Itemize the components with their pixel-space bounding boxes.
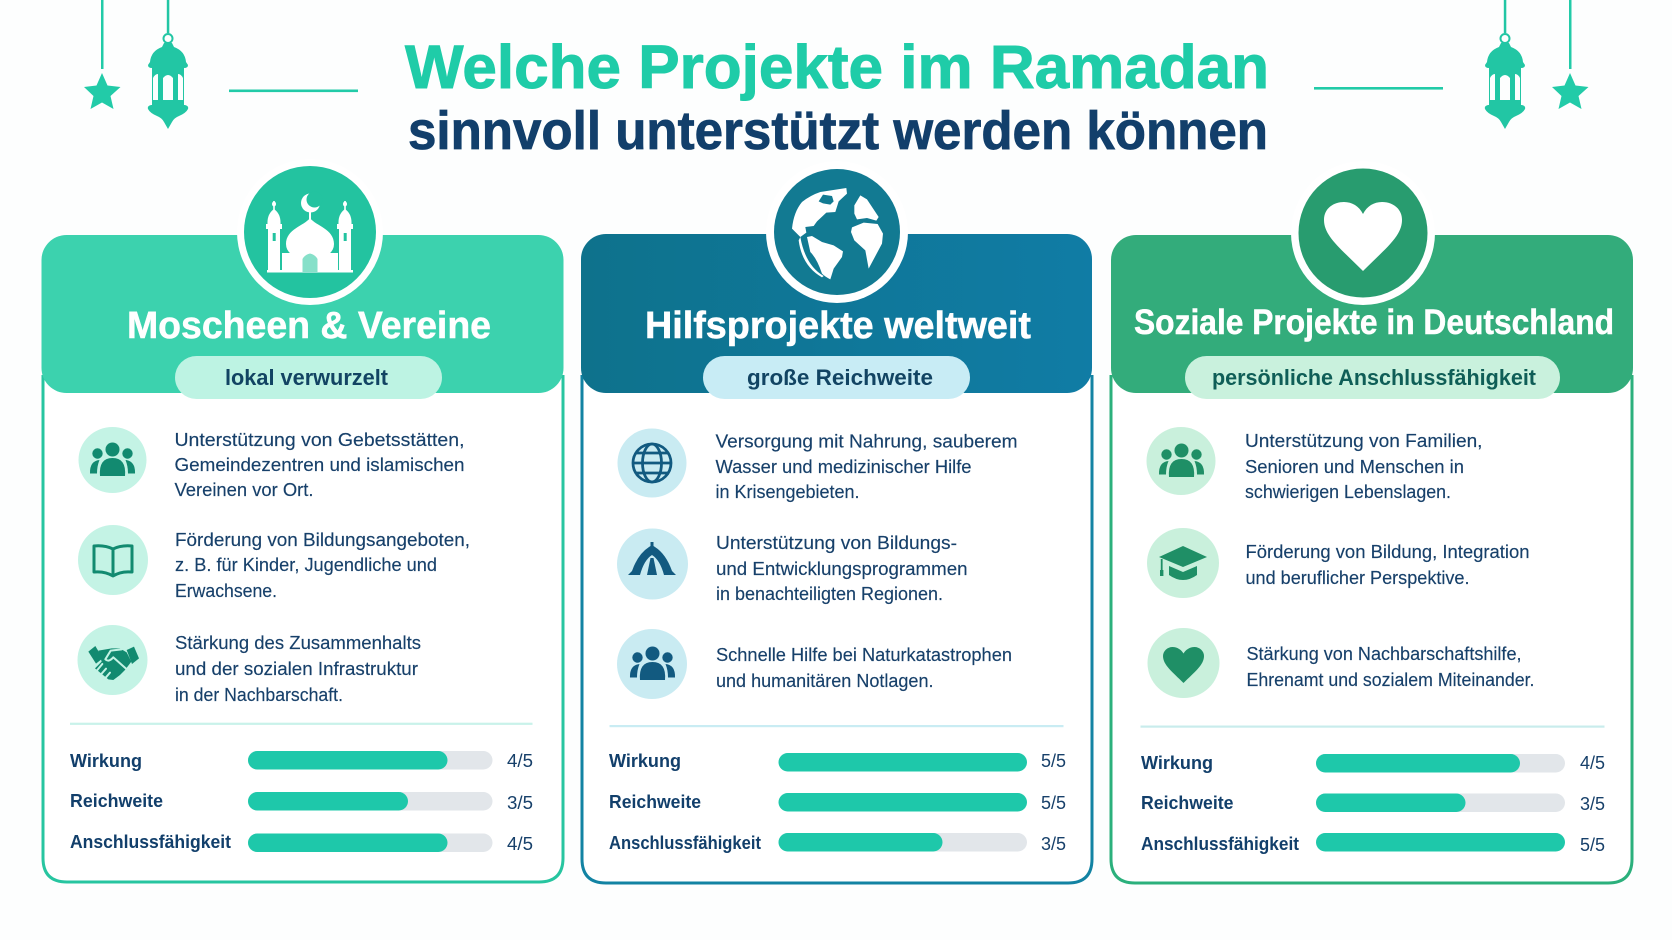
text: item 1: Wasser und medizinischer Hilfe	[716, 456, 972, 477]
rating: Reichweite 5/5: 5/5	[1041, 792, 1066, 813]
text: item 1	[716, 430, 1018, 502]
rating: Wirkung 4/5: 4/5	[1580, 752, 1605, 773]
rating: Wirkung 4/5: 4/5	[507, 750, 533, 771]
card heading: Moscheen & Vereine	[127, 305, 491, 347]
title	[405, 33, 1269, 161]
panel: Moscheen & Vereine	[42, 159, 564, 882]
rating: Reichweite 3/5	[1141, 792, 1605, 814]
rating: Reichweite 3/5	[70, 790, 533, 813]
icon: families	[1146, 427, 1216, 495]
card heading: Hilfsprojekte weltweit	[645, 305, 1031, 347]
title: sinnvoll unterstützt werden können	[408, 101, 1268, 161]
text: item 3: und der sozialen Infrastruktur	[175, 658, 418, 679]
icon: community	[78, 427, 146, 493]
card border	[43, 375, 563, 882]
text: item 3: Stärkung von Nachbarschaftshilfe,	[1246, 643, 1522, 664]
text: item 1	[174, 429, 464, 500]
tag pill: lokal verwurzelt	[225, 365, 389, 390]
card outline	[582, 375, 1092, 883]
text: item 3: Ehrenamt und sozialem Miteinander.	[1246, 669, 1534, 690]
rating: Anschlussfähigkeit 5/5: Anschlussfähigkeit	[1141, 833, 1299, 854]
rating: Wirkung 5/5: 5/5	[1041, 750, 1066, 771]
rating: Wirkung 4/5	[1141, 752, 1605, 773]
text: item 2: z. B. für Kinder, Jugendliche und	[175, 554, 437, 575]
rating: Anschlussfähigkeit 3/5: 3/5	[1041, 833, 1066, 854]
title: Welche Projekte im Ramadan	[405, 33, 1269, 101]
icon: book	[78, 525, 148, 595]
icon: mosque badge	[237, 159, 383, 305]
tag pill	[703, 356, 970, 399]
rating: Reichweite 3/5: 3/5	[507, 792, 533, 813]
text: item 1: schwierigen Lebenslagen.	[1245, 481, 1451, 502]
icon: tent	[617, 528, 688, 600]
text: item 2: Erwachsene.	[175, 580, 277, 601]
text: item 2	[716, 532, 968, 604]
icon: earth badge	[766, 161, 908, 303]
text: item 2	[175, 529, 470, 601]
rating: Reichweite 3/5: Reichweite	[70, 790, 163, 811]
decoration: right star	[1552, 0, 1588, 109]
card header band	[581, 234, 1092, 393]
rating: Wirkung 5/5: Wirkung	[609, 750, 681, 771]
text: item 1: in Krisengebieten.	[716, 481, 860, 502]
text: item 2: und beruflicher Perspektive.	[1246, 567, 1470, 588]
panel: Soziale Projekte in Deutschland	[1111, 161, 1633, 883]
rating: Anschlussfähigkeit 3/5	[609, 832, 1066, 854]
rating: Wirkung 4/5	[70, 750, 533, 771]
rating: Anschlussfähigkeit 4/5: Anschlussfähigkeit	[70, 831, 231, 852]
tag pill: persönliche Anschlussfähigkeit	[1212, 365, 1537, 390]
rating: Reichweite 5/5	[609, 791, 1066, 813]
rating: Anschlussfähigkeit 4/5: 4/5	[507, 833, 533, 854]
text: item 3: Schnelle Hilfe bei Naturkatastrophen	[716, 644, 1012, 665]
rating: Reichweite 5/5: Reichweite	[609, 791, 701, 812]
tag pill: große Reichweite	[747, 365, 933, 390]
card outline	[43, 375, 563, 882]
rating: Anschlussfähigkeit 4/5	[70, 831, 533, 854]
text: item 3: Stärkung des Zusammenhalts	[175, 632, 421, 653]
text: item 3: in der Nachbarschaft.	[175, 684, 343, 705]
icon: heart	[1148, 628, 1220, 698]
icon: handshake	[78, 625, 148, 695]
rating: Anschlussfähigkeit 5/5: 5/5	[1580, 834, 1605, 855]
rating: Wirkung 4/5: Wirkung	[1141, 752, 1213, 773]
text: item 1: Gemeindezentren und islamischen	[174, 454, 464, 475]
text: item 1: Unterstützung von Familien,	[1245, 430, 1482, 451]
text: item 2: und Entwicklungsprogrammen	[716, 558, 968, 579]
text: item 1	[1245, 430, 1482, 502]
text: item 2: Förderung von Bildungsangeboten,	[175, 529, 470, 550]
text: item 1: Senioren und Menschen in	[1245, 456, 1464, 477]
icon: heart badge	[1291, 161, 1435, 305]
icon: community	[617, 629, 687, 699]
text: item 1: Versorgung mit Nahrung, sauberem	[716, 430, 1018, 452]
divider line: left of title	[229, 90, 358, 92]
decoration: left star	[84, 0, 120, 109]
rating: Wirkung 4/5: Wirkung	[70, 750, 142, 771]
text: item 3	[1246, 643, 1534, 690]
rating: Reichweite 3/5: Reichweite	[1141, 792, 1234, 813]
decoration: left lantern	[148, 0, 188, 129]
text: item 1: Unterstützung von Gebetsstätten,	[174, 429, 464, 450]
card heading: Soziale Projekte in Deutschland	[1134, 303, 1614, 342]
card border	[1111, 375, 1632, 883]
divider line: right of title	[1314, 87, 1443, 90]
icon: globe	[618, 428, 686, 498]
tag pill	[1185, 356, 1560, 399]
rating: Anschlussfähigkeit 3/5: Anschlussfähigkeit	[609, 832, 761, 853]
text: item 2: in benachteiligten Regionen.	[716, 583, 943, 604]
text: item 2: Unterstützung von Bildungs-	[716, 532, 957, 553]
panel: Hilfsprojekte weltweit	[581, 161, 1092, 883]
text: item 1: Vereinen vor Ort.	[174, 479, 314, 500]
text: item 3	[175, 632, 421, 705]
card header band	[1111, 235, 1633, 393]
text: item 2	[1246, 541, 1530, 588]
rating: Wirkung 5/5	[609, 750, 1066, 772]
card header band	[42, 235, 564, 393]
icon: graduation cap	[1147, 528, 1219, 598]
rating: Reichweite 3/5: 3/5	[1580, 793, 1605, 814]
card outline	[1111, 375, 1632, 883]
card border	[582, 375, 1092, 883]
text: item 2: Förderung von Bildung, Integration	[1246, 541, 1530, 562]
text: item 3	[716, 644, 1012, 691]
rating: Anschlussfähigkeit 5/5	[1141, 833, 1605, 855]
text: item 3: und humanitären Notlagen.	[716, 670, 934, 691]
decoration: right lantern	[1485, 0, 1525, 129]
tag pill	[175, 356, 442, 399]
